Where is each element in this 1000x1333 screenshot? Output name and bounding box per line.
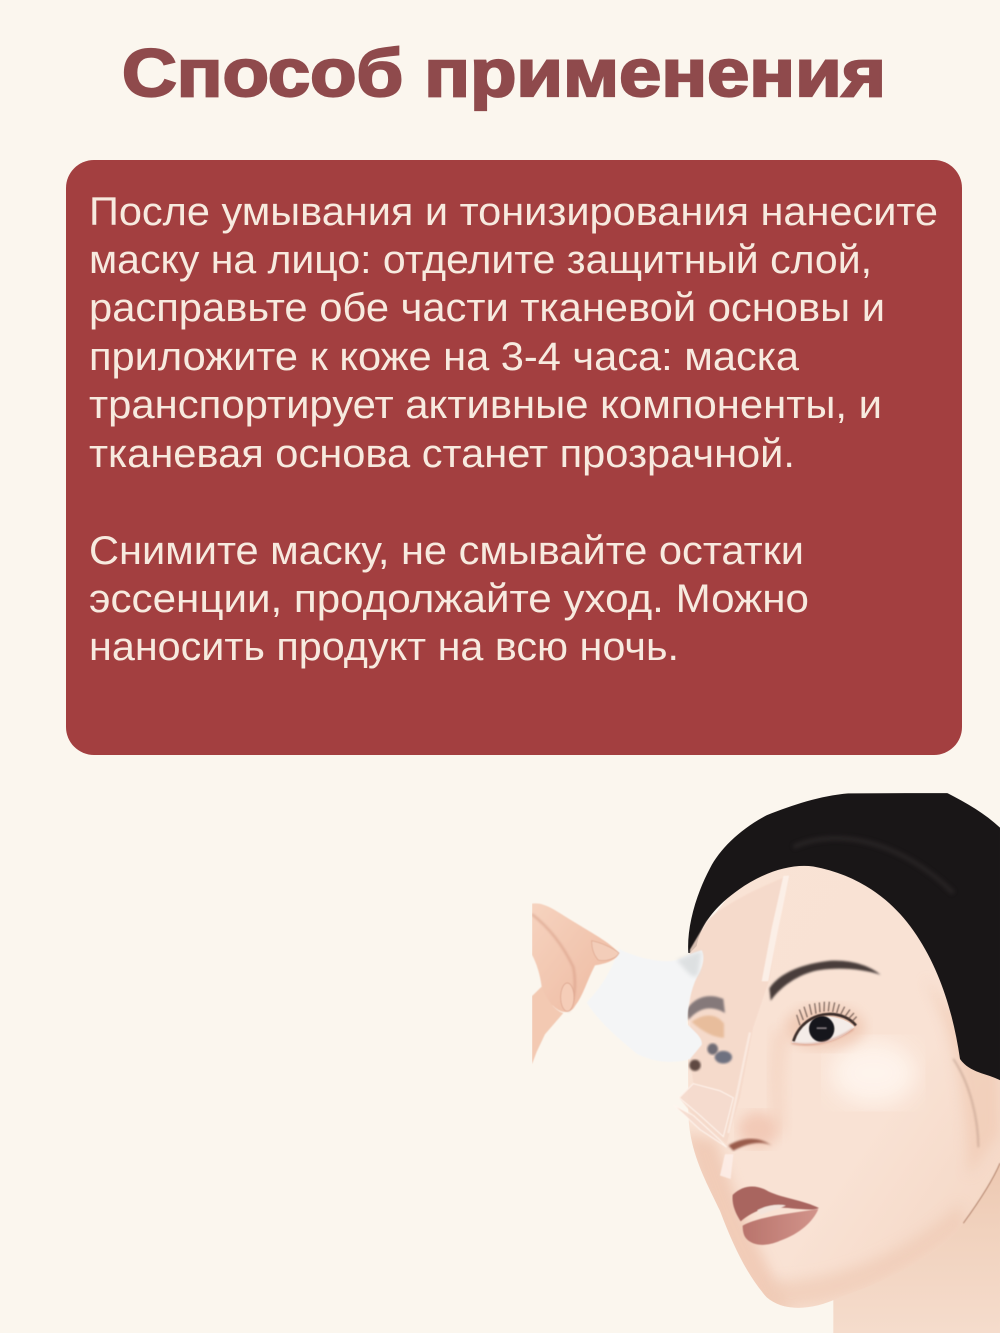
panel background bbox=[66, 160, 962, 755]
lips bbox=[732, 1186, 819, 1245]
title: Способ применения bbox=[122, 36, 886, 111]
eyelashes bbox=[797, 1002, 857, 1025]
lower lid bbox=[792, 1029, 853, 1045]
jaw contour line bbox=[963, 1163, 1000, 1223]
thumb nail bbox=[561, 983, 574, 1011]
finger crease bbox=[532, 914, 575, 1011]
right eyebrow bbox=[769, 961, 881, 1001]
nose shading bbox=[738, 1112, 778, 1147]
mask lip strip bbox=[720, 1154, 733, 1179]
text block: first paragraph: приложите к коже на 3-4 часа: маска bbox=[89, 335, 800, 379]
chin shading bbox=[778, 1210, 963, 1307]
text block: first paragraph bbox=[89, 190, 938, 476]
dark smudges under mask bbox=[689, 1043, 732, 1071]
hairline wisps bbox=[953, 1059, 978, 1147]
mask highlight strip bbox=[762, 875, 789, 981]
text block: second paragraph: Снимите маску, не смывайте остатки bbox=[89, 529, 804, 573]
facial shading, clipped to face bbox=[683, 978, 1000, 1313]
text block: first paragraph: маску на лицо: отделите защитный слой, bbox=[89, 238, 872, 282]
fingernail bbox=[592, 941, 619, 961]
temple and ear-side shading bbox=[934, 994, 1000, 1164]
face bbox=[688, 851, 1000, 1308]
hair sheen bbox=[793, 838, 953, 893]
peeled white mask bbox=[684, 950, 704, 1060]
text block: second paragraph: наносить продукт на всю ночь. bbox=[89, 625, 679, 669]
text block: second paragraph bbox=[89, 529, 809, 669]
left eyebrow through mask bbox=[687, 996, 725, 1020]
nostril bbox=[728, 1139, 772, 1151]
lower lip bbox=[743, 1209, 818, 1245]
eye hole in mask bbox=[692, 1015, 724, 1038]
mask shading bbox=[677, 951, 702, 976]
eye white bbox=[792, 1017, 854, 1044]
mask fold highlight bbox=[728, 1032, 750, 1133]
eye shadow bbox=[785, 1005, 865, 1049]
lower hand bbox=[532, 987, 563, 1064]
hand bbox=[532, 903, 619, 1064]
text block: first paragraph: После умывания и тонизирования нанесите bbox=[89, 190, 938, 234]
upper lip bbox=[732, 1186, 819, 1221]
text block: first paragraph: тканевая основа станет прозрачной. bbox=[89, 432, 795, 476]
right eye bbox=[785, 1002, 865, 1049]
text block: first paragraph: транспортирует активные компоненты, и bbox=[89, 383, 882, 427]
hand base bbox=[532, 903, 619, 1012]
text block: first paragraph: расправьте обе части тканевой основы и bbox=[89, 286, 885, 330]
iris bbox=[809, 1016, 834, 1042]
neck bbox=[833, 1164, 1000, 1333]
transparent mask film bbox=[681, 880, 782, 1139]
hair bbox=[688, 793, 1000, 1080]
eye catchlight bbox=[817, 1027, 827, 1029]
teeth bbox=[757, 1205, 786, 1215]
photo: woman peeling sheet mask bbox=[532, 793, 1000, 1333]
mask lower flap bbox=[673, 1084, 733, 1147]
left jaw shading bbox=[690, 1132, 786, 1306]
panel: instructions bbox=[66, 160, 962, 755]
nose bridge side shading bbox=[770, 1034, 786, 1126]
lash line bbox=[793, 1014, 856, 1041]
cheek highlight bbox=[830, 1041, 917, 1105]
text block: second paragraph: эссенции, продолжайте уход. Можно bbox=[89, 577, 809, 621]
